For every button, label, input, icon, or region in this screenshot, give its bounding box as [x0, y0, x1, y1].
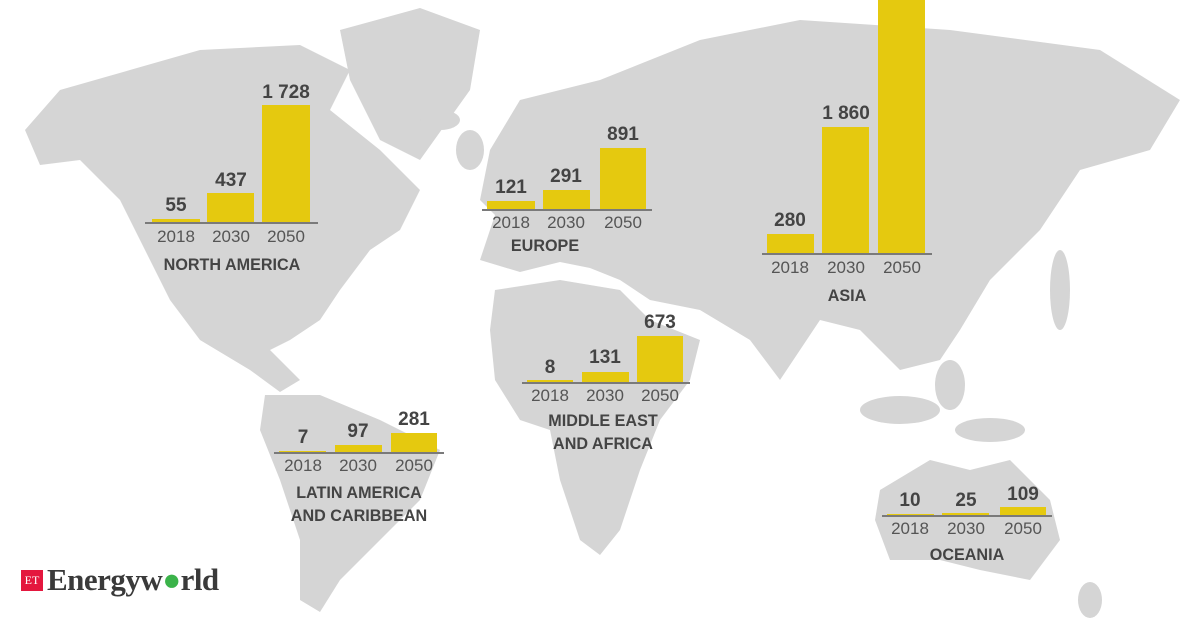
chart: Latin America: LATIN AMERICA — [296, 483, 422, 502]
chart: Europe: EUROPE — [511, 236, 579, 255]
chart: Oceania: 2050 — [1004, 519, 1042, 538]
chart: Oceania: 25 — [955, 490, 977, 511]
chart: North America: 2030 — [212, 227, 250, 246]
chart: North America: 2050 — [267, 227, 305, 246]
chart: Asia: 2050 — [883, 258, 921, 277]
chart: Europe: 2018 — [492, 213, 530, 232]
chart: Latin America: 281 — [398, 409, 430, 430]
chart: Oceania: 109 — [1007, 484, 1039, 505]
chart: Asia: 280 — [774, 210, 806, 231]
chart: Middle East and Africa: MIDDLE EAST — [548, 411, 658, 430]
chart: Latin America: 97 — [347, 421, 369, 442]
chart: Middle East and Africa: 673 — [644, 312, 676, 333]
chart: North America: NORTH AMERICA — [164, 255, 300, 274]
chart: Asia: 1 860 — [822, 103, 870, 124]
chart: Asia: 2030 — [827, 258, 865, 277]
chart: Middle East and Africa: 131 — [589, 347, 621, 368]
chart: Europe: 291 — [550, 166, 582, 187]
chart: Latin America: AND CARIBBEAN — [291, 506, 427, 525]
chart: North America: 1 728 — [262, 82, 310, 103]
chart: North America: 55 — [165, 195, 187, 216]
chart: Asia: 2018 — [771, 258, 809, 277]
chart: Europe: 891 — [607, 124, 639, 145]
chart: Europe: 2030 — [547, 213, 585, 232]
chart: Middle East and Africa: 2050 — [641, 386, 679, 405]
chart: Middle East and Africa: 8 — [545, 357, 555, 378]
chart: Europe: 2050 — [604, 213, 642, 232]
chart: Middle East and Africa: 2030 — [586, 386, 624, 405]
chart: Oceania: 10 — [899, 490, 921, 511]
chart: North America: 437 — [215, 170, 247, 191]
chart: Oceania: OCEANIA — [930, 545, 1004, 564]
chart: Middle East and Africa: 2018 — [531, 386, 569, 405]
chart: Latin America: 2050 — [395, 456, 433, 475]
chart: Latin America: 2030 — [339, 456, 377, 475]
logo: ET Energyworld: ET — [25, 573, 39, 587]
chart: Oceania: 2030 — [947, 519, 985, 538]
chart: Middle East and Africa: AND AFRICA — [553, 434, 653, 453]
chart: Europe: 121 — [495, 177, 527, 198]
chart: Latin America: 7 — [298, 427, 308, 448]
chart: Oceania: 2018 — [891, 519, 929, 538]
chart: Asia: ASIA — [828, 286, 866, 305]
logo: ET Energyworld: Energyw●rld — [47, 562, 219, 597]
chart: North America: 2018 — [157, 227, 195, 246]
chart: Latin America: 2018 — [284, 456, 322, 475]
